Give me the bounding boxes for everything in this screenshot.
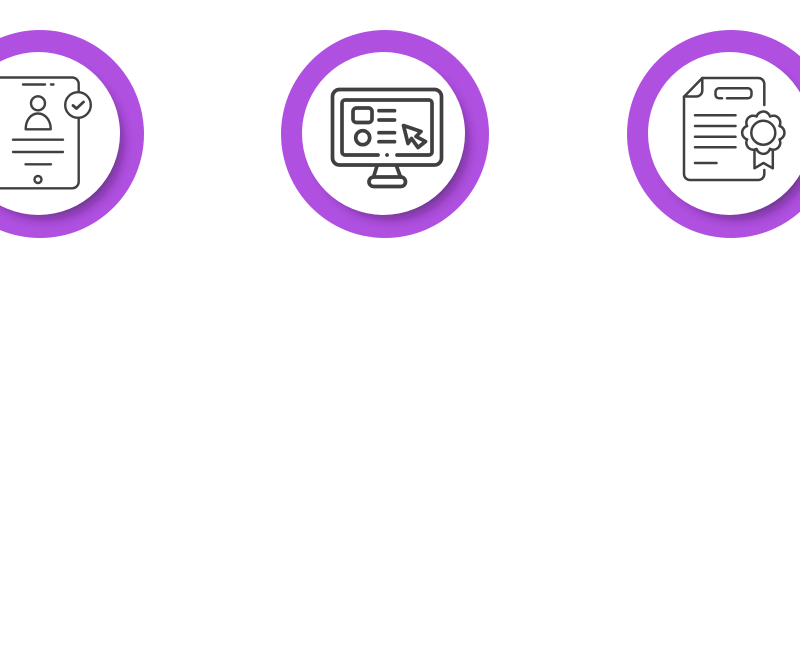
ring shadow: [0, 66, 122, 218]
icon: computer monitor with cursor: [332, 90, 442, 186]
ring shadow: [315, 66, 467, 218]
purple ring: [281, 30, 489, 238]
panel: profile tablet badge: [0, 30, 144, 238]
purple ring: [0, 30, 144, 238]
white disc: [648, 52, 800, 215]
icon: certificate document with rosette: [684, 78, 784, 180]
panel: online monitor badge: [281, 30, 489, 238]
white disc: [0, 52, 120, 215]
purple ring: [627, 30, 800, 238]
icon: tablet with verified profile: [0, 78, 91, 188]
ring shadow: [661, 66, 800, 218]
panel: certificate badge: [627, 30, 800, 238]
white disc: [302, 52, 465, 215]
